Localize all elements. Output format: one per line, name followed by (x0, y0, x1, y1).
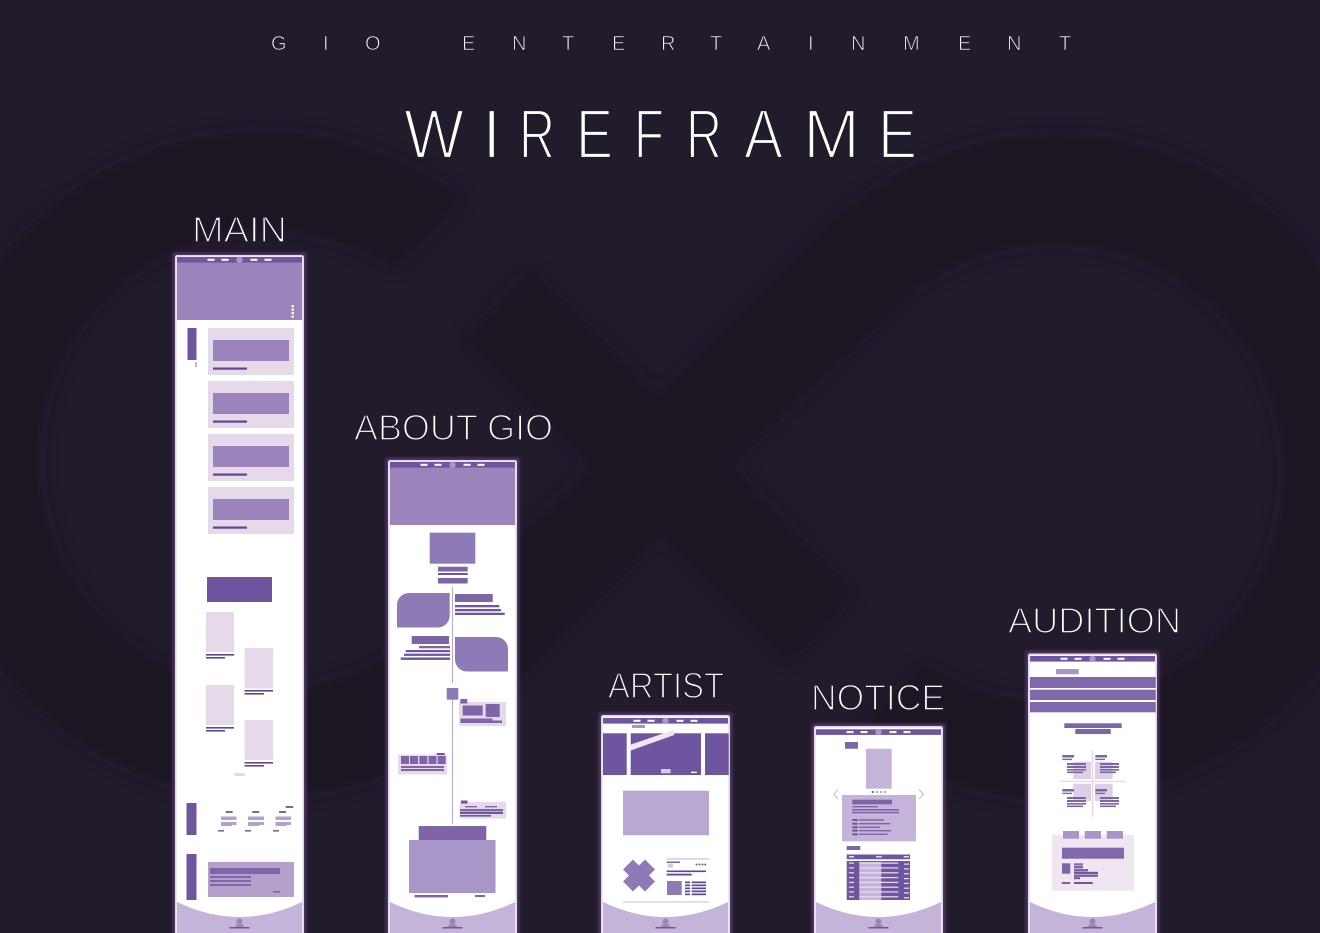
navigation bar (177, 257, 302, 263)
carousel dots (872, 791, 886, 793)
footer (816, 902, 941, 933)
navigation bar (1030, 656, 1155, 662)
footer (1030, 902, 1155, 933)
panel: ABOUT GIO wireframe (386, 458, 520, 933)
icon: left arrow (834, 790, 838, 799)
title: M (803, 95, 860, 173)
title: E (576, 95, 613, 173)
artist profile (666, 858, 709, 895)
video block (623, 791, 709, 835)
title: W (404, 95, 464, 173)
timeline card: photos (459, 699, 506, 726)
heading: AUDITION: AUDITION (1008, 600, 1181, 641)
notice detail card (842, 795, 916, 841)
background logo: infinity and X mark (0, 133, 1320, 798)
history block one (397, 593, 505, 628)
footer (603, 902, 728, 933)
section banner (207, 577, 272, 602)
timeline card: albums (398, 753, 447, 774)
brand line: GIOENTERTAINMENT (271, 33, 1071, 55)
artist visual row (603, 730, 729, 775)
navigation bar (603, 718, 728, 724)
panel: MAIN wireframe (172, 252, 306, 933)
icon: X logo (623, 860, 655, 892)
audition section (186, 854, 294, 900)
heading: ARTIST: ARTIST (608, 665, 724, 706)
heading: MAIN: MAIN (192, 209, 287, 250)
navigation bar (816, 729, 941, 735)
title: A (744, 95, 783, 173)
history block two (401, 636, 508, 672)
hero (177, 262, 302, 320)
small tag (1056, 669, 1079, 674)
panel: ARTIST wireframe (598, 712, 732, 933)
title: F (634, 95, 664, 173)
slider dots (291, 305, 294, 318)
application form (1052, 831, 1134, 891)
panel: NOTICE wireframe (812, 724, 946, 933)
timeline card: notes (460, 800, 506, 818)
intro image and text (430, 533, 475, 584)
timeline line (452, 587, 453, 683)
notice section (186, 803, 293, 835)
small tag (847, 846, 860, 850)
accordion bars (1030, 677, 1156, 712)
small tag (845, 742, 858, 749)
process grid (1060, 750, 1126, 817)
notice table (847, 854, 910, 900)
section title (1064, 723, 1122, 734)
hero (390, 467, 515, 525)
heading: NOTICE: NOTICE (811, 677, 945, 718)
heading: ABOUT GIO: ABOUT GIO (354, 407, 553, 448)
section tag (188, 328, 196, 360)
panel: AUDITION wireframe (1026, 651, 1160, 933)
small tag (632, 725, 645, 728)
timeline node (447, 688, 458, 700)
icon: right arrow (919, 790, 924, 799)
closing feature (409, 826, 496, 897)
footer (390, 902, 515, 933)
footer (177, 902, 302, 933)
navigation bar (390, 462, 515, 468)
news cards (208, 328, 294, 534)
title: E (878, 95, 917, 173)
title: R (686, 95, 722, 173)
staggered gallery (206, 612, 273, 776)
notice image (866, 749, 892, 789)
title: R (519, 95, 555, 173)
title (404, 95, 917, 173)
title: I (482, 95, 501, 173)
